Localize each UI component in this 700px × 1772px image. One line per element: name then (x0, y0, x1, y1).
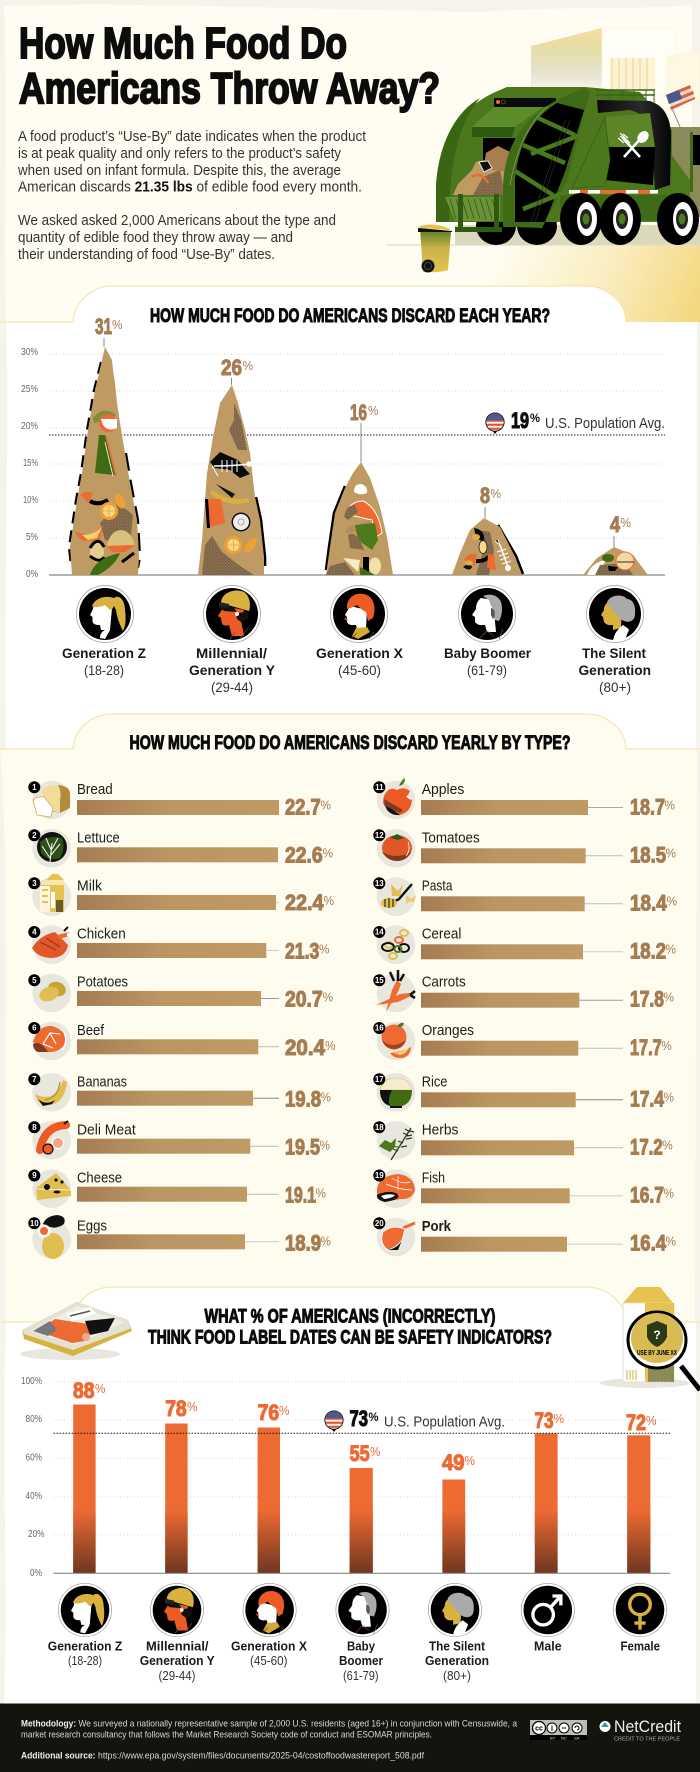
row 1 bread: 1 (32, 783, 37, 792)
row 12 tomatoes (373, 829, 676, 868)
row 9 cheese: Cheese (77, 1170, 122, 1187)
title: How Much Food Do (19, 19, 347, 68)
row 20 pork: % (666, 1235, 676, 1249)
value leader lines (104, 338, 614, 547)
pile: Silent 4% (583, 547, 648, 575)
value labels: % (646, 1414, 656, 1428)
value labels: % (95, 1382, 106, 1396)
row 11 apples (373, 778, 675, 819)
Generation Z (48, 1583, 122, 1668)
value labels (73, 1378, 656, 1475)
row 17 rice: Rice (422, 1074, 447, 1091)
icon: rice bowl (380, 1078, 412, 1107)
row 5 potatoes: % (322, 991, 333, 1005)
axis labels: 20% (21, 421, 38, 432)
row 7 bananas: Bananas (77, 1074, 127, 1091)
ground gradient (387, 245, 700, 322)
row 15 carrots: 15 (375, 976, 384, 985)
intro text: A food product’s “Use-By” date indicates when the product (18, 129, 366, 145)
Silent: The Silent (582, 645, 646, 661)
Silent (425, 1583, 489, 1683)
indicator panel (494, 98, 556, 107)
row 4 chicken: Chicken (77, 926, 126, 943)
Generation X: Generation X (316, 645, 404, 661)
value labels: 4 (610, 512, 621, 537)
rear wheels (476, 207, 557, 245)
value labels: % (464, 1454, 475, 1468)
Silent: Generation (425, 1653, 489, 1668)
icon: beef (33, 1026, 66, 1052)
row 12 tomatoes: 18.5 (630, 842, 666, 867)
row 16 oranges: 16 (375, 1024, 384, 1033)
value labels: 72 (626, 1410, 646, 1435)
row 11 apples: 11 (375, 783, 384, 792)
Millennial: Millennial/ (196, 645, 267, 661)
axis labels (21, 347, 38, 580)
value labels: 73 (534, 1408, 554, 1433)
Female (613, 1583, 667, 1654)
intro text: when used on infant formula. Despite this, the average (17, 163, 341, 179)
icon: chicken (32, 927, 71, 958)
row 19 fish: Fish (422, 1170, 445, 1187)
row 3 milk: 22.4 (285, 890, 324, 915)
row 1 bread: Bread (77, 781, 113, 798)
row 4 chicken: 4 (32, 928, 37, 937)
icon: bananas (35, 1080, 67, 1106)
row 9 cheese: 19.1 (285, 1183, 316, 1208)
row 3 milk: Milk (77, 877, 102, 894)
illustration: milk carton and magnifier (600, 1287, 700, 1390)
row 19 fish (373, 1169, 674, 1208)
icon: bread (33, 785, 70, 817)
row 16 oranges: % (661, 1039, 672, 1053)
value labels: 8 (480, 483, 490, 508)
methodology text: https://www.epa.gov/system/files/documents/2025-04/costoffoodwastereport_508.pdf (98, 1750, 424, 1761)
value labels: % (554, 1412, 564, 1426)
value labels (95, 314, 631, 537)
value labels: % (187, 1400, 198, 1414)
pile: Gen X 16% (326, 462, 393, 575)
row 19 fish: 16.7 (630, 1183, 664, 1208)
value labels: % (112, 318, 122, 332)
illustration: food tray (20, 1302, 132, 1360)
panel: safety chart section (0, 1287, 700, 1704)
row 1 bread (28, 781, 331, 819)
row 5 potatoes (28, 974, 333, 1012)
icon: orange (382, 1023, 411, 1058)
row 7 bananas: 7 (32, 1075, 37, 1084)
garbage mound (453, 146, 510, 195)
methodology text: Methodology: We surveyed a nationally representative sample of 2,000 U.S. residents (aged 16+) in conjunction with Censuswide, a (21, 1719, 518, 1730)
row 5 potatoes: Potatoes (77, 974, 128, 991)
Generation Z: Generation Z (48, 1639, 122, 1654)
row 7 bananas: 19.8 (285, 1087, 321, 1112)
heading: chart 3: WHAT % OF AMERICANS (INCORRECTLY) (204, 1307, 496, 1328)
icon: carrots (376, 970, 415, 1012)
average callout: U.S. Population Avg. (545, 415, 665, 432)
value labels: % (242, 359, 253, 373)
row 11 apples: % (664, 798, 675, 812)
Baby Boomer (336, 1583, 389, 1683)
truck cab (665, 127, 700, 217)
intro text: We asked asked 2,000 Americans about the type and (18, 213, 336, 229)
NetCredit logo: NetCredit (614, 1717, 681, 1736)
row 14 cereal (373, 925, 676, 964)
row 3 milk (28, 874, 334, 916)
icon: herbs (379, 1128, 414, 1160)
axis labels: 100% (21, 1376, 42, 1387)
row 6 beef (28, 1022, 336, 1060)
row 6 beef: % (325, 1039, 336, 1053)
row 4 chicken: % (319, 942, 330, 956)
average callout (485, 408, 665, 434)
row 15 carrots (373, 970, 674, 1012)
axis labels (21, 1376, 45, 1579)
row 18 herbs (373, 1121, 673, 1160)
row 8 deli meat: 19.5 (285, 1134, 320, 1159)
creative commons badge: BY (550, 1735, 556, 1740)
axis labels: 10% (23, 495, 38, 506)
row 20 pork: 20 (375, 1219, 384, 1228)
row 17 rice: 17 (375, 1075, 384, 1084)
average callout: 73 (350, 1406, 368, 1431)
chart: discard by generation (21, 314, 665, 580)
icon: apple (383, 778, 412, 815)
row 15 carrots: % (664, 991, 674, 1005)
row 12 tomatoes: 12 (375, 831, 384, 840)
truck body (436, 87, 672, 222)
average callout (324, 1406, 505, 1432)
axis labels: 0% (26, 569, 38, 580)
bar chart: left column (28, 781, 336, 1259)
row 11 apples: Apples (422, 781, 464, 798)
axis labels: 60% (26, 1452, 42, 1464)
Female: Female (620, 1639, 660, 1654)
value labels: 76 (258, 1400, 279, 1425)
row 19 fish: 19 (375, 1171, 384, 1180)
icon: cereal (382, 930, 409, 959)
pile: Millennial 26% (198, 385, 265, 575)
axis labels: 30% (21, 347, 38, 358)
row 5 potatoes: 5 (32, 976, 37, 985)
row 15 carrots: 17.8 (630, 987, 664, 1012)
creative commons badge (530, 1720, 587, 1740)
row 9 cheese: 9 (32, 1171, 37, 1180)
Generation X (231, 1583, 307, 1668)
icon: pasta (381, 884, 416, 908)
row 20 pork: 16.4 (630, 1231, 667, 1256)
row 6 beef: 20.4 (285, 1035, 326, 1060)
Baby Boomer (444, 586, 532, 678)
row 1 bread: 22.7 (285, 794, 321, 819)
icon: pork chop (382, 1223, 415, 1250)
row 2 lettuce: % (322, 846, 333, 860)
row 8 deli meat (28, 1121, 330, 1160)
Silent: Generation (578, 662, 651, 678)
portraits: chart 1 (62, 586, 651, 695)
row 19 fish: % (664, 1187, 674, 1201)
axis labels: 0% (30, 1568, 42, 1579)
value labels: 78 (165, 1396, 187, 1421)
value labels: 31 (95, 314, 112, 339)
row 2 lettuce: 22.6 (285, 842, 323, 867)
row 4 chicken: 21.3 (285, 938, 319, 963)
Baby Boomer: (61-79) (343, 1668, 379, 1683)
Silent: (80+) (443, 1668, 471, 1683)
NetCredit logo: CREDIT TO THE PEOPLE (614, 1736, 680, 1742)
intro text: American discards 21.35 lbs of edible food every month. (18, 180, 362, 196)
row 18 herbs: % (662, 1138, 673, 1152)
row 20 pork: Pork (422, 1218, 452, 1235)
row 11 apples: 18.7 (630, 794, 665, 819)
cargo panel (572, 100, 671, 190)
title (19, 19, 440, 113)
row 13 pasta: 13 (375, 879, 384, 888)
intro text (17, 129, 366, 263)
axis labels: 40% (26, 1491, 42, 1502)
intro text: their understanding of food “Use-By” dates. (18, 247, 275, 263)
row 9 cheese: % (316, 1187, 326, 1201)
value labels: 88 (73, 1378, 94, 1403)
row 16 oranges (373, 1022, 672, 1060)
row 13 pasta: 18.4 (630, 890, 667, 915)
creative commons badge: NC (561, 1735, 567, 1740)
icon: trash bin (418, 225, 452, 272)
value labels: 49 (442, 1450, 464, 1475)
tailgate frame (503, 88, 590, 228)
Baby Boomer: Baby Boomer (444, 645, 532, 661)
row 8 deli meat: 8 (32, 1123, 37, 1132)
row 10 eggs: 10 (30, 1219, 39, 1228)
axis labels: 15% (23, 458, 38, 469)
value labels: % (279, 1404, 290, 1418)
row 7 bananas (28, 1073, 331, 1112)
Generation X: (45-60) (250, 1653, 288, 1668)
footer (0, 1704, 700, 1772)
row 10 eggs: Eggs (77, 1218, 107, 1235)
reflective stripe (569, 190, 658, 194)
row 6 beef: Beef (77, 1022, 105, 1039)
icon: tomato (382, 834, 412, 861)
panel: food type section (0, 714, 700, 1322)
icon: fork and spoon (618, 129, 651, 157)
intro text: is at peak quality and only refers to the product’s safety (18, 146, 342, 162)
row 14 cereal: Cereal (422, 926, 461, 943)
pile: Boomer 8% (452, 518, 523, 575)
axis labels: 20% (28, 1529, 45, 1540)
row 4 chicken (28, 925, 330, 964)
row 2 lettuce (28, 829, 333, 868)
illustration: garbage truck (436, 87, 700, 245)
methodology text: Additional source: (21, 1750, 96, 1761)
row 12 tomatoes: Tomatoes (422, 829, 480, 846)
row 13 pasta: Pasta (422, 877, 453, 894)
intro text: quantity of edible food they throw away — and (18, 230, 293, 246)
chassis (560, 195, 670, 220)
value labels: 26 (221, 355, 242, 380)
average callout: 19 (511, 408, 529, 433)
Silent: The Silent (429, 1639, 486, 1654)
bars (73, 1404, 650, 1573)
row 10 eggs (28, 1215, 331, 1259)
value labels: % (620, 516, 631, 530)
axis labels: 5% (26, 532, 38, 543)
axis labels: 25% (21, 384, 38, 395)
icon: flag on truck (666, 85, 695, 150)
Generation Z: (18-28) (68, 1653, 102, 1668)
icon: milk carton (40, 874, 64, 912)
Silent: (80+) (599, 679, 631, 695)
hopper (445, 194, 502, 232)
Baby Boomer: Boomer (339, 1653, 383, 1668)
Male (521, 1583, 574, 1654)
Silent (578, 586, 651, 695)
icon: potatoes (37, 979, 68, 1004)
row 17 rice: % (664, 1091, 674, 1105)
icon: deli meat (40, 1121, 68, 1154)
Baby Boomer: (61-79) (467, 662, 507, 678)
Baby Boomer: Baby (347, 1639, 376, 1654)
row 12 tomatoes: % (666, 846, 676, 860)
magnifier (628, 1312, 700, 1390)
average callout: % (530, 411, 540, 425)
row 17 rice: 17.4 (630, 1087, 665, 1112)
panel: white chart section (0, 286, 697, 752)
Generation X: Generation X (231, 1639, 307, 1654)
value labels: % (490, 487, 501, 501)
row 2 lettuce: 2 (32, 831, 37, 840)
creative commons badge: cc (535, 1726, 543, 1732)
heading: chart 1: HOW MUCH FOOD DO AMERICANS DISCARD EACH YEAR? (150, 306, 550, 327)
row 6 beef: 6 (32, 1024, 37, 1033)
axis labels: 80% (26, 1414, 42, 1425)
heading: chart 3: THINK FOOD LABEL DATES CAN BE SAFETY INDICATORS? (148, 1327, 552, 1348)
bar chart: label dates as safety indicators (21, 1376, 670, 1579)
Millennial: Millennial/ (146, 1639, 209, 1654)
creative commons badge: SA (574, 1735, 580, 1740)
illustration: buildings (387, 28, 700, 245)
row 16 oranges: 17.7 (630, 1035, 662, 1060)
value labels: % (370, 1445, 380, 1459)
row 18 herbs: 17.2 (630, 1134, 663, 1159)
row 3 milk: % (324, 894, 334, 908)
row 8 deli meat: % (320, 1138, 330, 1152)
portraits: chart 3 (48, 1583, 667, 1683)
row 13 pasta: % (666, 894, 677, 908)
value labels: 16 (350, 400, 367, 425)
Generation X (316, 586, 404, 678)
bar chart: right column (373, 778, 677, 1256)
row 2 lettuce: Lettuce (77, 829, 120, 846)
value labels: % (368, 404, 378, 418)
wheels (560, 193, 699, 245)
row 20 pork (373, 1217, 676, 1256)
average callout: % (368, 1410, 379, 1424)
row 8 deli meat: Deli Meat (77, 1122, 136, 1139)
magnifier: USE BY JUNE XX (637, 1350, 677, 1357)
row 18 herbs: 18 (375, 1123, 384, 1132)
Millennial: (29-44) (158, 1668, 196, 1683)
row 15 carrots: Carrots (422, 974, 466, 991)
row 14 cereal: 18.2 (630, 938, 666, 963)
row 17 rice (373, 1073, 674, 1112)
row 14 cereal: % (666, 942, 676, 956)
row 14 cereal: 14 (375, 928, 384, 937)
Male: Male (534, 1639, 562, 1654)
row 10 eggs: % (320, 1235, 331, 1249)
value labels: 55 (350, 1441, 370, 1466)
panel: header (4, 5, 700, 322)
rear opening (483, 138, 515, 194)
Generation Z: Generation Z (62, 645, 146, 661)
Millennial (140, 1583, 215, 1683)
methodology text: market research consultancy that follows the Market Research Society code of conduct and ESOMAR principles. (21, 1729, 432, 1740)
icon: eggs (38, 1215, 65, 1259)
roof rail (596, 90, 655, 102)
Millennial: Generation Y (189, 662, 276, 678)
icon: lettuce (37, 832, 67, 862)
Millennial: (29-44) (211, 679, 253, 695)
icon: cheese (36, 1173, 71, 1200)
Millennial: Generation Y (140, 1653, 215, 1668)
pile: Gen Z 31% (69, 347, 140, 575)
magnifier: ? (653, 1328, 661, 1342)
row 7 bananas: % (320, 1091, 331, 1105)
methodology text (21, 1719, 518, 1761)
row 3 milk: 3 (32, 879, 37, 888)
row 13 pasta (373, 877, 677, 916)
row 16 oranges: Oranges (422, 1022, 474, 1039)
Millennial (189, 586, 276, 695)
row 1 bread: % (320, 798, 331, 812)
row 10 eggs: 18.9 (285, 1231, 321, 1256)
Generation Z: (18-28) (84, 662, 124, 678)
NetCredit logo (600, 1717, 681, 1742)
heading: chart 3 (148, 1307, 552, 1348)
title: Americans Throw Away? (19, 64, 440, 113)
Generation Z (62, 586, 146, 678)
average callout: U.S. Population Avg. (384, 1414, 505, 1431)
Generation X: (45-60) (338, 662, 381, 678)
icon: fish steak (377, 1174, 415, 1202)
row 9 cheese (28, 1169, 326, 1208)
row 5 potatoes: 20.7 (285, 987, 323, 1012)
row 18 herbs: Herbs (422, 1122, 458, 1139)
